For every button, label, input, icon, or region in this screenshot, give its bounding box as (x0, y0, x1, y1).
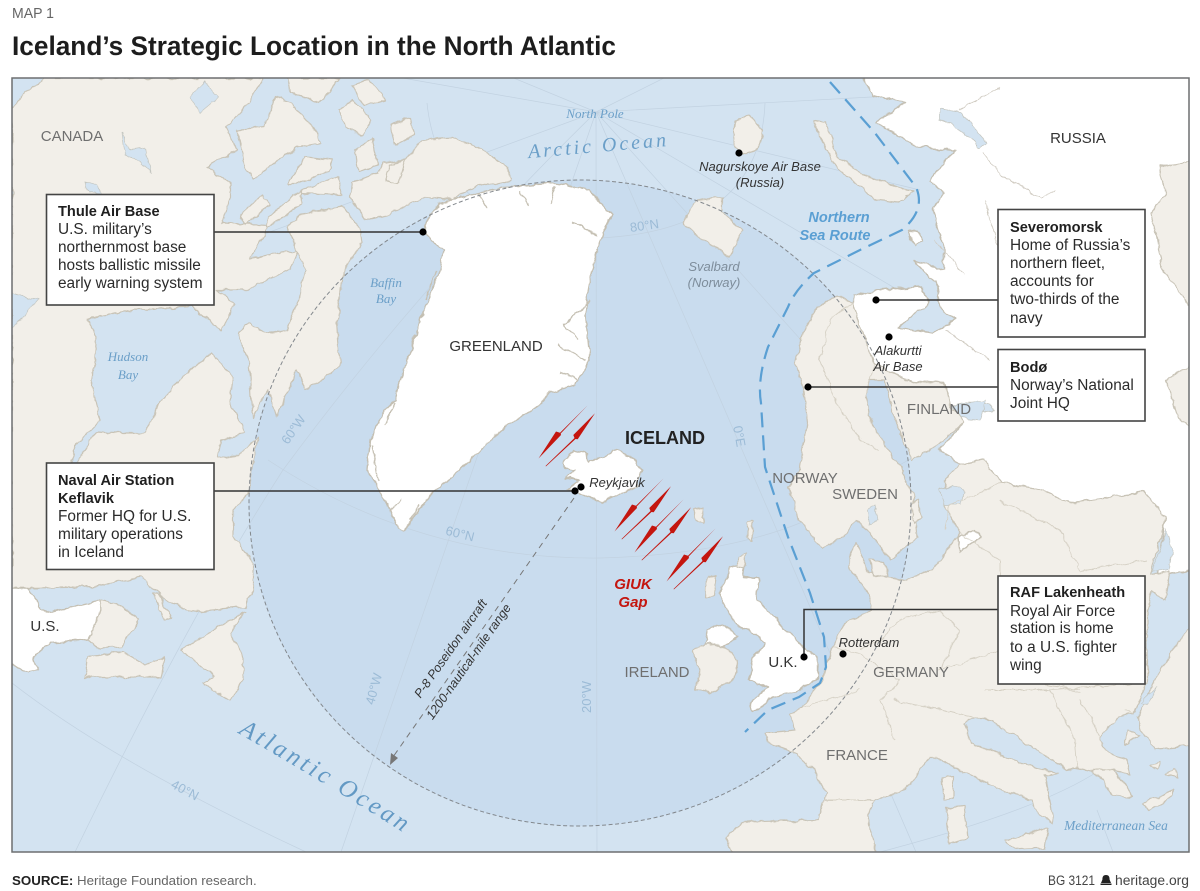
base: Reykjavik: Reykjavik (589, 475, 646, 490)
land: Novaya Zemlya (814, 120, 914, 203)
base: Rotterdam (839, 635, 900, 658)
graticule labels (169, 216, 749, 803)
graticule labels: 60°N (444, 523, 476, 544)
country labels: SWEDEN (832, 486, 898, 503)
base: Nagurskoye Air Base (699, 149, 821, 190)
publication reference (1048, 873, 1189, 888)
water: Ob bay (940, 108, 987, 148)
P-8 range area (249, 180, 911, 826)
callout: Bodø: Bodø (1010, 360, 1047, 376)
graticule labels: 0°E (730, 425, 749, 448)
label: Iceland: ICELAND (625, 428, 705, 448)
water labels: Atlantic Ocean (236, 722, 407, 832)
GIUK Gap lightning bolts (538, 406, 723, 589)
P-8 range ring (249, 180, 911, 826)
land: US (5, 588, 101, 673)
water labels: North Pole (565, 106, 624, 121)
label: Svalbard: (Norway) (688, 275, 740, 290)
land: Iceland (563, 450, 642, 502)
callout: Thule Air Base: hosts ballistic missile (58, 257, 201, 274)
country labels: GERMANY (873, 664, 949, 681)
rivers and borders (803, 88, 1147, 800)
graticule labels: 40°W (362, 671, 385, 706)
base: Alakurtti Air Base: Alakurtti (874, 343, 923, 358)
callout: RAF Lakenheath: wing (1009, 657, 1042, 674)
land: Greece and Crete (1092, 730, 1178, 810)
graticule labels: 40°N (169, 777, 201, 803)
water labels: Arctic Ocean (525, 129, 670, 163)
land: continental Europe (726, 460, 1170, 860)
callout: RAF Lakenheath: RAF Lakenheath (1010, 585, 1125, 601)
land: Greenland (367, 183, 612, 530)
source note: SOURCE: Heritage Foundation research. (12, 873, 257, 888)
callout: Severomorsk: two-thirds of the (1010, 291, 1120, 308)
callout: Naval Air Station Keflavik: military operations (58, 526, 183, 543)
land: Russia (853, 70, 1195, 577)
callout: Thule Air Base: U.S. military’s (58, 221, 152, 238)
land: Nova Scotia (84, 652, 165, 677)
base: Nagurskoye Air Base: Nagurskoye Air Base (699, 159, 821, 174)
land: Kolguev (908, 230, 923, 246)
graticule labels: 80°N (629, 216, 660, 235)
callout: Thule Air Base (46, 194, 427, 305)
land: Arctic archipelago (237, 78, 415, 227)
land: Ellesmere Island (350, 137, 511, 220)
label: GIUK Gap: GIUK (614, 576, 653, 593)
Greenland fjords (372, 186, 596, 520)
land: Turkey (1136, 628, 1188, 750)
country labels: RUSSIA (1050, 130, 1106, 147)
callout: Severomorsk: Home of Russia’s (1010, 237, 1131, 254)
country labels: FINLAND (907, 401, 971, 418)
P-8 range arrow (390, 498, 574, 765)
icon: Liberty Bell (1100, 875, 1112, 885)
land: Svalbard (684, 197, 742, 257)
land: Scandinavia (788, 295, 963, 560)
label: P-8 range: 1200-nautical-mile range (424, 601, 514, 722)
callout: RAF Lakenheath: to a U.S. fighter (1010, 639, 1117, 656)
map label: MAP 1: MAP 1 (12, 6, 54, 22)
callout: Thule Air Base: northernmost base (58, 239, 186, 256)
country labels: CANADA (41, 128, 103, 145)
callout: Thule Air Base: early warning system (58, 275, 203, 292)
publication reference: heritage.org (1115, 873, 1189, 888)
water labels: Hudson (107, 349, 148, 364)
land: Denmark islands and Baltic islands (870, 500, 921, 577)
label: P-8 range: P-8 Poseidon aircraft (412, 596, 490, 701)
land: Kaliningrad (958, 530, 982, 551)
country labels: NORWAY (772, 470, 838, 487)
land: Northern Ireland (704, 625, 738, 647)
water labels (107, 106, 1168, 833)
land: Ireland (692, 643, 738, 693)
land: Baffin Island (237, 207, 362, 417)
callout: Naval Air Station Keflavik: Naval Air Station (58, 473, 174, 489)
publication reference: BG 3121 (1048, 873, 1095, 888)
label: Northern Sea Route: Sea Route (800, 228, 870, 244)
land: Canada mainland (12, 78, 298, 612)
water labels: Bay (376, 291, 396, 306)
country labels: U.K. (768, 654, 798, 671)
base: Alakurtti Air Base (872, 333, 923, 374)
callout: Bodø (804, 350, 1145, 421)
label: Svalbard: Svalbard (688, 259, 740, 274)
country labels: IRELAND (624, 664, 690, 681)
base: Rotterdam: Rotterdam (839, 635, 900, 650)
callout: RAF Lakenheath (800, 576, 1145, 684)
land: UK (719, 563, 818, 712)
callout: Naval Air Station Keflavik: Keflavik (58, 491, 115, 507)
callout: Severomorsk (872, 210, 1145, 337)
water labels: Mediterranean Sea (1063, 818, 1168, 833)
base: Nagurskoye Air Base: (Russia) (736, 175, 784, 190)
base: Alakurtti Air Base: Air Base (872, 359, 923, 374)
callout: Severomorsk: Severomorsk (1010, 220, 1103, 236)
callout: Severomorsk: accounts for (1010, 273, 1094, 290)
label: GIUK Gap (614, 576, 653, 611)
country labels: GREENLAND (449, 338, 543, 355)
callout: Thule Air Base: Thule Air Base (58, 204, 160, 220)
land: Anticosti (153, 592, 171, 620)
country labels (30, 128, 1106, 764)
label: GIUK Gap: Gap (618, 594, 648, 611)
label: Northern Sea Route (800, 210, 870, 244)
water labels: Bay (118, 367, 138, 382)
callout: Severomorsk: northern fleet, (1010, 255, 1105, 272)
land: Franz Josef Land (733, 116, 763, 155)
graticule labels: 60°W (278, 411, 309, 447)
water: lakes and Baltic details (12, 82, 1172, 705)
label: Northern Sea Route: Northern (808, 210, 870, 226)
water labels: Baffin (370, 275, 402, 290)
land: central Asia lower (1165, 366, 1188, 426)
country labels: FRANCE (826, 747, 888, 764)
callout: Naval Air Station Keflavik: in Iceland (58, 544, 124, 561)
callout: RAF Lakenheath: Royal Air Force (1010, 603, 1115, 620)
callout: Bodø: Norway’s National (1010, 377, 1134, 394)
land: Hebrides, Shetland and Faroe (693, 508, 753, 598)
land: central Asia east (1150, 160, 1188, 306)
graticule labels: 20°W (579, 680, 594, 713)
callout: Severomorsk: navy (1010, 310, 1043, 327)
callout: Bodø: Joint HQ (1010, 395, 1070, 412)
label: Svalbard (688, 259, 740, 290)
Northern Sea Route (745, 82, 919, 732)
land: Corsica and Sardinia (942, 777, 1048, 850)
land: Newfoundland (180, 612, 245, 700)
land: New Brunswick and Nova Scotia (88, 600, 138, 648)
title: Iceland’s Strategic Location in the North Atlantic (12, 31, 616, 61)
callout: Naval Air Station Keflavik: Former HQ for U.S. (58, 508, 191, 525)
callout: RAF Lakenheath: station is home (1010, 620, 1114, 637)
callout: Naval Air Station Keflavik (46, 463, 579, 570)
country labels: U.S. (30, 618, 60, 635)
